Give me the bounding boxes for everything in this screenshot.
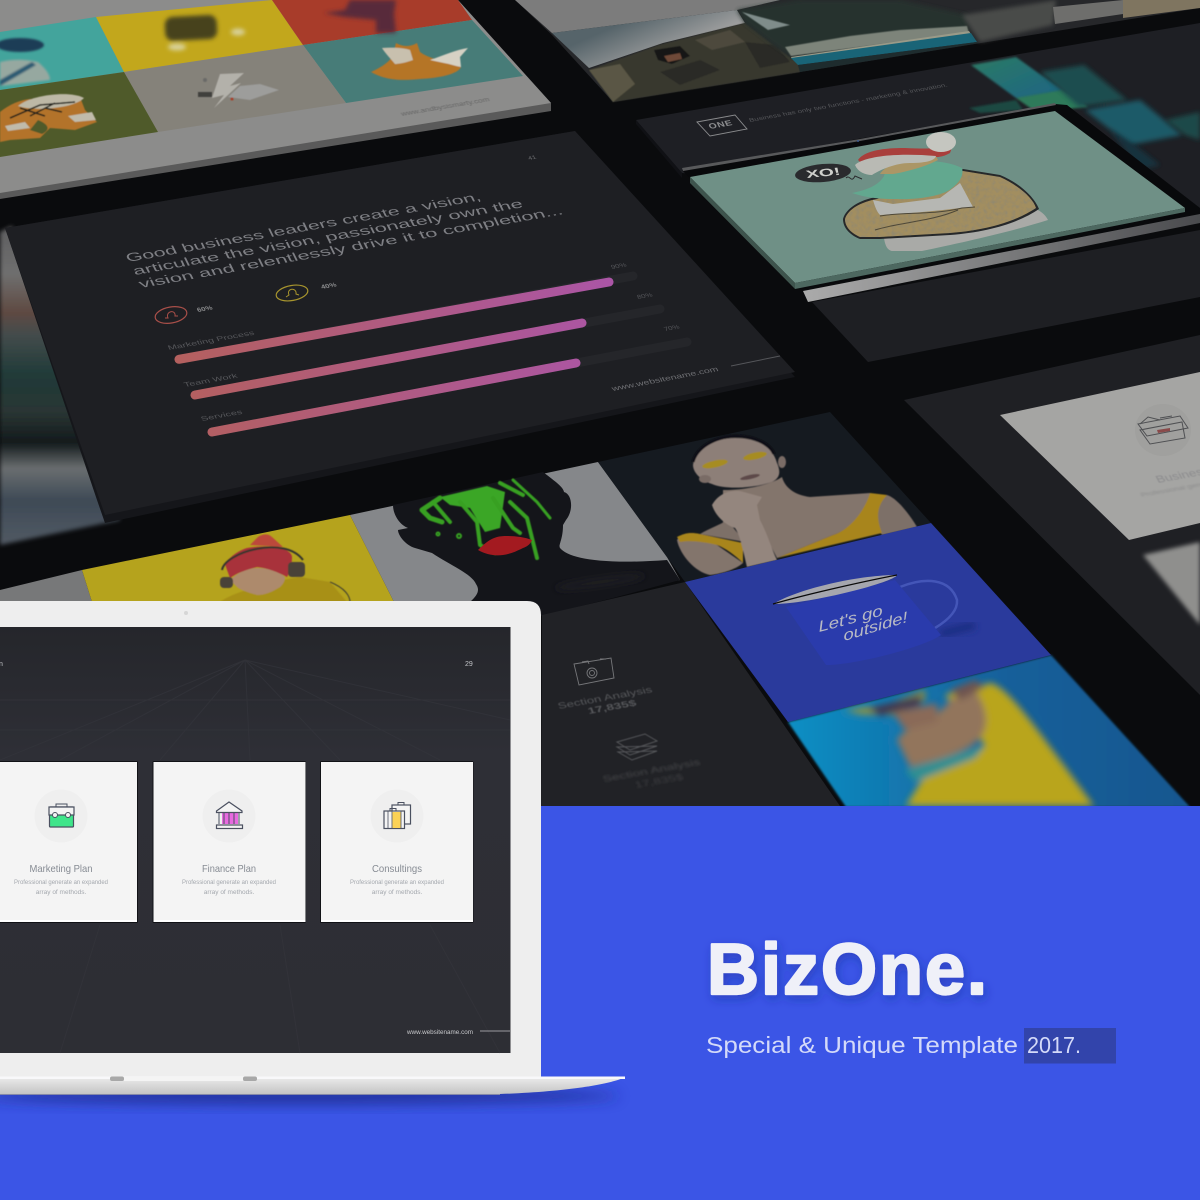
stat: 60 percent: 60% xyxy=(196,305,214,314)
quote text: vision and relentlessly drive it to completion... xyxy=(136,205,566,291)
panel: blue scarf portrait photo xyxy=(788,655,1190,807)
card: marketing plan: array of methods. xyxy=(36,889,86,896)
camera dot xyxy=(184,611,188,615)
panel: baby photo xyxy=(0,515,394,602)
page number: 41 xyxy=(527,155,538,162)
panel: green paint portrait photo xyxy=(350,462,680,616)
icon: layers xyxy=(617,734,657,760)
panel: section analysis slide xyxy=(541,582,840,806)
bar: services 70 percent: Services xyxy=(199,408,244,423)
paint: green drips xyxy=(422,480,550,558)
subtitle: 2017. xyxy=(1027,1032,1081,1058)
page number: 29 xyxy=(465,661,473,668)
label: section analysis: 17,835$ xyxy=(586,698,639,717)
illustration: speech bubble xyxy=(794,162,862,184)
illustration: lightning and objects xyxy=(198,73,279,108)
card: finance plan: Professional generate an expanded xyxy=(182,879,276,886)
bar: team work 80 percent xyxy=(182,292,660,395)
photo: blurred right slides xyxy=(962,0,1200,42)
label: section analysis blurred: 17,835$ xyxy=(633,772,686,791)
colour blocks xyxy=(969,57,1200,170)
quote text: Good business leaders create a vision, xyxy=(123,191,484,265)
illustration: santa head and beard xyxy=(852,132,963,199)
illustration: speech bubble: XO! xyxy=(805,165,842,181)
panel: one slide header xyxy=(636,23,1200,213)
photo: mug xyxy=(773,575,975,665)
bar: marketing process 90 percent: Marketing Process xyxy=(166,329,256,352)
badge: one xyxy=(697,115,747,136)
icon: pink bank xyxy=(202,790,256,842)
panel: business card slide xyxy=(904,335,1200,695)
photo: soldier xyxy=(589,23,800,102)
bar: team work 80 percent: Team Work xyxy=(182,372,239,389)
bar: services 70 percent xyxy=(199,324,687,432)
label: section analysis xyxy=(556,685,654,717)
card: finance plan: array of methods. xyxy=(204,889,254,896)
label: website url: www.andbysismarty.com xyxy=(399,96,491,118)
scene background xyxy=(0,0,1200,807)
illustration: ink splash on yellow xyxy=(164,15,245,50)
header text: Business has only two functions - marketing & innovation. xyxy=(748,82,949,124)
quote text xyxy=(123,191,566,291)
card: marketing plan xyxy=(0,761,138,923)
laptop screen xyxy=(0,627,510,1053)
laptop mockup xyxy=(0,601,625,1095)
card: marketing plan: Marketing Plan xyxy=(30,863,93,875)
panel: top right photo slide xyxy=(515,0,1200,102)
bar: services 70 percent: 70% xyxy=(663,324,681,333)
bar: team work 80 percent: 80% xyxy=(636,292,654,301)
panel: quote and progress slide xyxy=(5,131,795,523)
mug lettering xyxy=(818,603,909,645)
bar: marketing process 90 percent: 90% xyxy=(610,262,628,271)
card: consultings: Professional generate an expanded xyxy=(350,879,444,886)
badge: one: ONE xyxy=(707,118,734,131)
shading: neck and chest xyxy=(555,571,645,593)
laptop base xyxy=(0,1076,625,1095)
website url xyxy=(406,1029,510,1036)
label: section analysis blurred xyxy=(601,758,702,791)
subtitle: Special & Unique Template xyxy=(706,1032,1018,1058)
photo: baby with red hat xyxy=(220,534,350,602)
card: finance plan xyxy=(152,761,306,923)
illustration: figure on teal xyxy=(0,38,50,86)
tablet mockup with illustration xyxy=(682,103,1200,290)
label: section analysis blurred: Section Analysis xyxy=(601,758,702,785)
website url xyxy=(609,356,780,393)
photo: sky xyxy=(552,10,745,68)
icon: yellow folders xyxy=(370,790,424,842)
illustration: fox xyxy=(371,43,468,80)
website url: www.websitename.com xyxy=(406,1029,473,1036)
icon: green briefcase xyxy=(34,790,88,842)
bar: marketing process 90 percent xyxy=(166,262,633,359)
mug lettering: Let's go xyxy=(818,603,884,636)
illustration: figure on red xyxy=(324,0,396,33)
photo: woman xyxy=(677,436,917,575)
paint: red lips xyxy=(478,536,532,555)
panel: yellow eye shadow portrait photo xyxy=(598,412,931,582)
quote text: articulate the vision, passionately own the xyxy=(130,197,526,278)
panel: illustration grid slide xyxy=(0,0,551,199)
illustration: santa body xyxy=(843,169,1048,251)
illustration: tree squirrel xyxy=(0,94,97,142)
card: business xyxy=(1000,372,1200,540)
card: marketing plan: Professional generate an expanded xyxy=(14,879,108,886)
panel: enamel mug photo xyxy=(685,523,1051,722)
subtitle highlight xyxy=(1024,1028,1116,1064)
panel: blurred photo slide at left edge xyxy=(0,226,120,545)
card: second xyxy=(1143,542,1200,625)
blue background panel xyxy=(0,806,1200,1200)
stat: 40 percent xyxy=(275,282,338,303)
photo: aerial city and water xyxy=(737,0,980,72)
laptop lid xyxy=(0,601,541,1079)
card: consultings: Consultings xyxy=(372,863,422,875)
photo: woman in yellow xyxy=(844,680,1094,806)
title: BizOne. xyxy=(707,930,987,1010)
stat: 60 percent xyxy=(154,304,214,326)
icon: camera xyxy=(574,658,614,685)
website url: www.websitename.com xyxy=(609,365,720,393)
panel: lower right dark slide xyxy=(812,230,1200,362)
card: consultings xyxy=(320,761,474,923)
laptop shadow xyxy=(0,1088,620,1104)
card: consultings: array of methods. xyxy=(372,889,422,896)
card: finance plan: Finance Plan xyxy=(202,863,256,875)
label: section analysis: Section Analysis xyxy=(556,685,654,712)
stat: 40 percent: 40% xyxy=(320,282,338,291)
strip: device edge xyxy=(803,214,1200,302)
mug lettering: outside! xyxy=(843,609,909,645)
